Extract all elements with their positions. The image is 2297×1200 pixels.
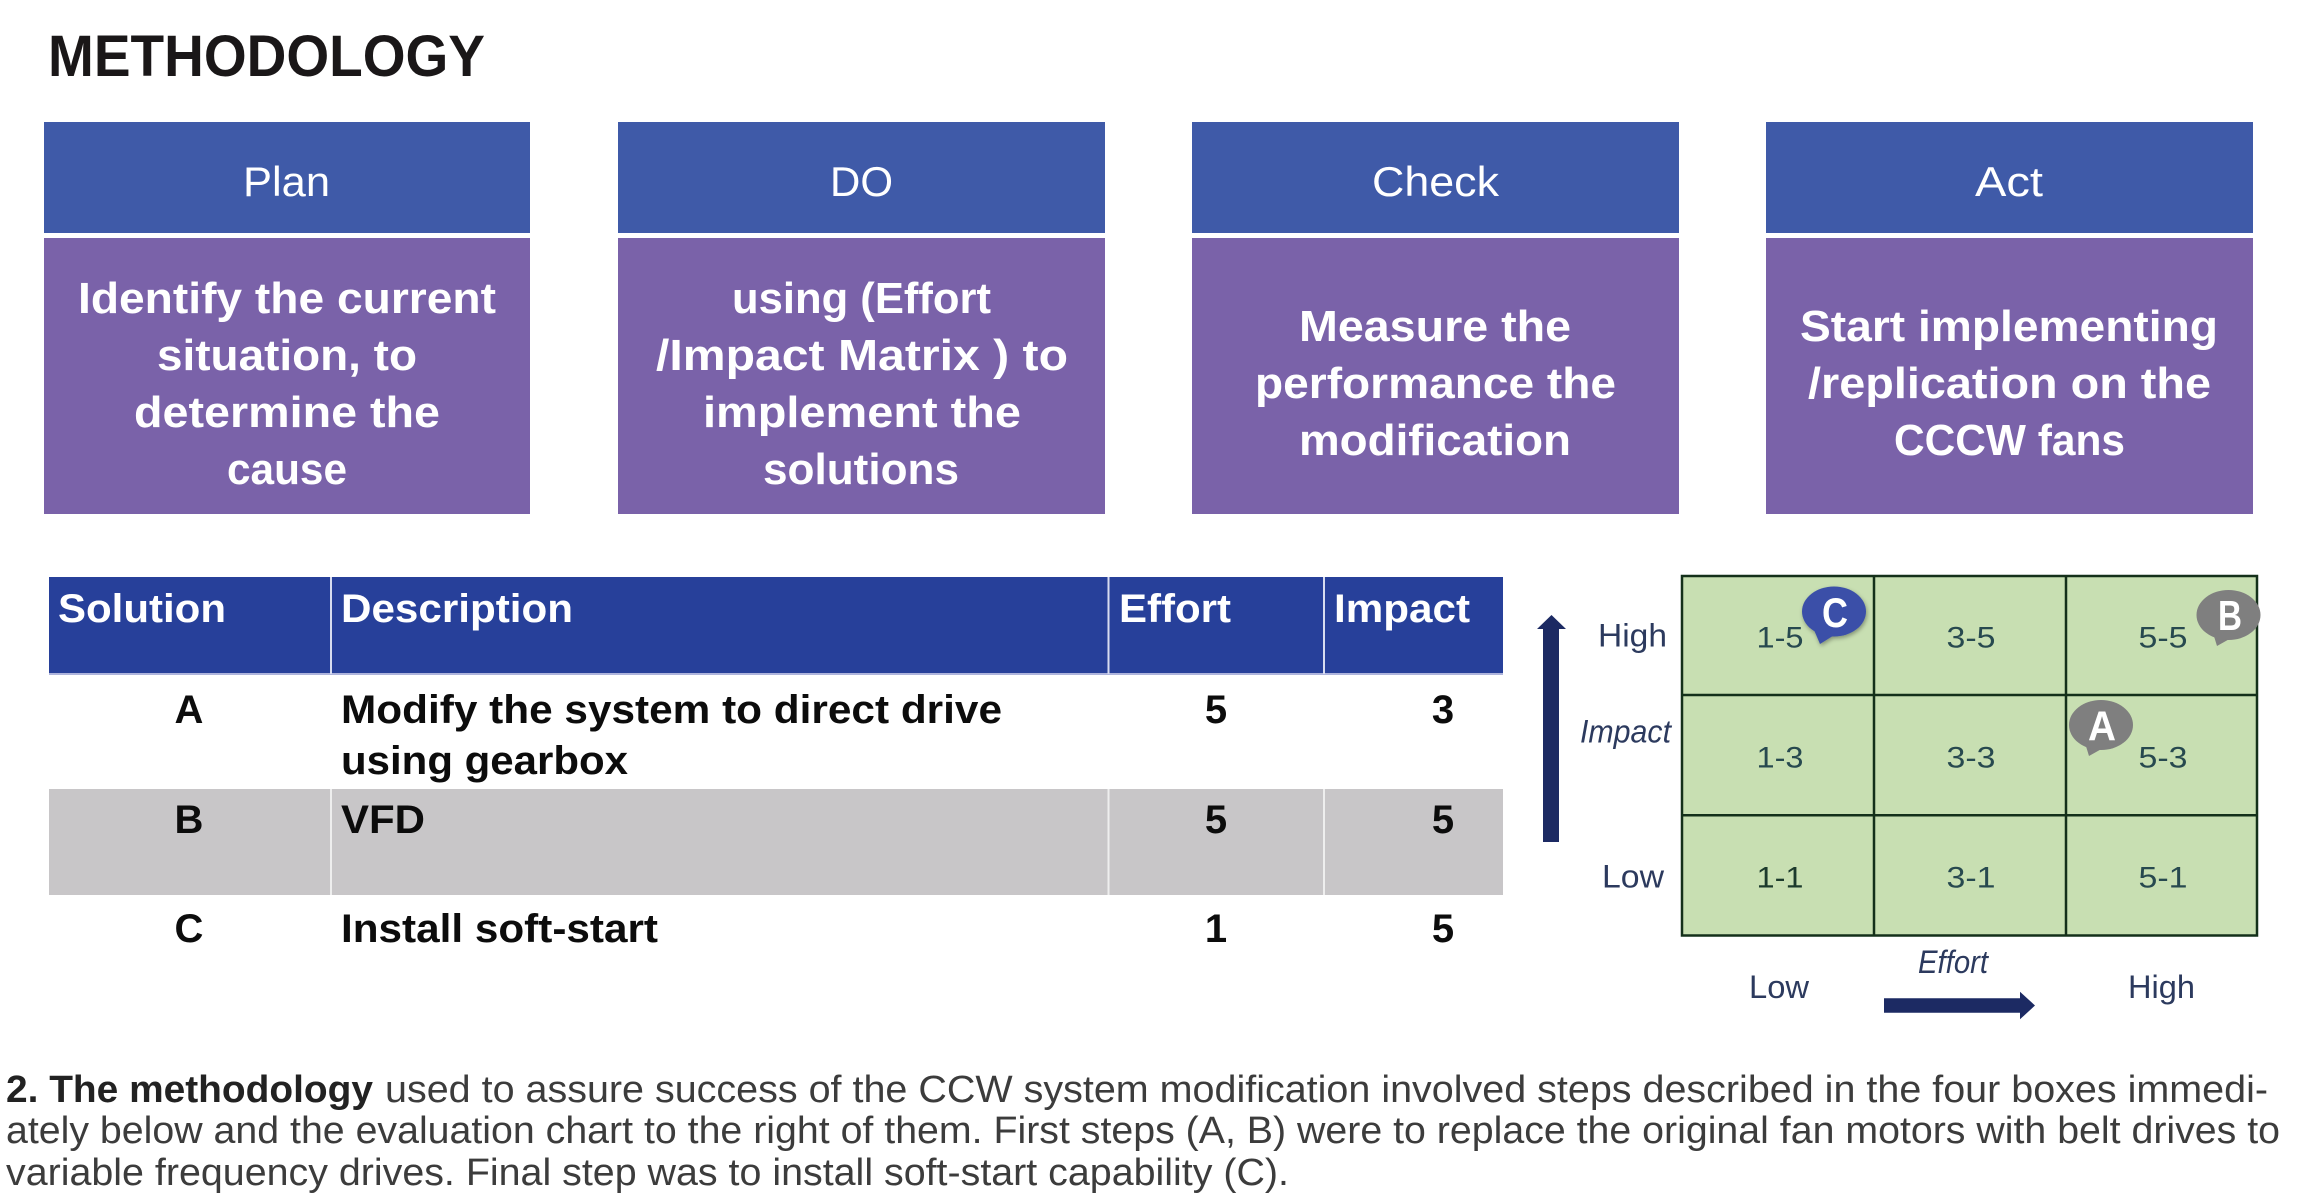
act body: /replication on the	[1808, 359, 2211, 408]
marker C	[1802, 586, 1866, 644]
marker A	[2069, 700, 2133, 756]
row C: C	[175, 907, 203, 951]
matrix grid: 5-5	[2138, 622, 2188, 655]
row B: VFD	[341, 798, 425, 842]
row B: B	[175, 798, 203, 842]
plan body	[44, 238, 530, 514]
do header: DO	[830, 158, 893, 205]
act body: Start implementing	[1800, 302, 2218, 351]
check body: performance the	[1255, 359, 1616, 408]
matrix grid: 1-3	[1756, 741, 1804, 774]
do body: /Impact Matrix ) to	[656, 331, 1068, 380]
matrix grid: 1-1	[1756, 861, 1804, 894]
row A	[175, 688, 1454, 783]
do body: using (Effort	[732, 274, 991, 323]
plan body: cause	[227, 445, 347, 494]
caption text: ately below and the evaluation chart to the right of them. First steps (A, B) were to replace the original fan motors with belt drives to	[6, 1110, 2280, 1152]
row A: Modify the system to direct drive	[341, 688, 1002, 732]
act header: Act	[1975, 158, 2043, 205]
table header row	[49, 577, 1503, 675]
check body	[1192, 238, 1679, 514]
caption text: variable frequency drives. Final step was to install soft-start capability (C).	[6, 1152, 1289, 1194]
effort axis labels: High	[2128, 969, 2195, 1005]
caption text: 2. The methodology	[6, 1069, 373, 1111]
matrix grid: 1-5	[1756, 622, 1804, 655]
row C	[175, 907, 1454, 951]
table header row: Solution	[58, 587, 226, 631]
impact axis labels	[1580, 618, 1672, 894]
do body: implement the	[703, 388, 1021, 437]
caption text: used to assure success of the CCW system modification involved steps described in the four boxes immedi-	[385, 1069, 2268, 1111]
check header	[1192, 122, 1679, 233]
do header	[618, 122, 1105, 233]
panel: act	[1766, 122, 2253, 514]
act header	[1766, 122, 2253, 233]
plan header	[44, 122, 530, 233]
row B: 5	[1432, 798, 1454, 842]
row B: 5	[1205, 798, 1227, 842]
check body: Measure the	[1299, 302, 1571, 351]
row A: A	[175, 688, 203, 732]
effort axis labels: Low	[1749, 969, 1810, 1005]
marker C: C	[1822, 589, 1848, 636]
check body: modification	[1299, 416, 1571, 465]
matrix grid	[1682, 576, 2257, 936]
row C: 5	[1432, 907, 1454, 951]
marker B	[2196, 590, 2260, 646]
act body	[1766, 238, 2253, 514]
plan header: Plan	[243, 158, 330, 205]
check header: Check	[1372, 158, 1500, 205]
table header row: Impact	[1334, 587, 1470, 631]
impact axis labels: High	[1598, 618, 1667, 654]
impact axis labels: Low	[1602, 858, 1665, 894]
impact axis labels: Impact	[1580, 714, 1672, 750]
panel: check	[1192, 122, 1679, 514]
arrow: impact	[1537, 615, 1566, 842]
effort axis labels	[1749, 944, 2195, 1005]
matrix grid: 5-1	[2138, 861, 2188, 894]
arrow: effort	[1884, 992, 2035, 1019]
plan body: Identify the current	[78, 274, 496, 323]
do body: solutions	[763, 445, 959, 494]
marker B: B	[2218, 592, 2242, 639]
plan body: situation, to	[157, 331, 417, 380]
title: METHODOLOGY	[48, 24, 485, 89]
row A: 3	[1432, 688, 1454, 732]
effort axis labels: Effort	[1918, 944, 1989, 980]
matrix grid: 3-3	[1946, 741, 1996, 774]
caption text	[6, 1069, 2280, 1194]
row C: Install soft-start	[341, 907, 658, 951]
row A: 5	[1205, 688, 1227, 732]
table header row: Description	[341, 587, 573, 631]
matrix grid: 3-5	[1946, 622, 1996, 655]
do body	[618, 238, 1105, 514]
panel: plan	[44, 122, 530, 514]
row C: 1	[1205, 907, 1227, 951]
solutions table	[49, 577, 1503, 951]
marker A: A	[2088, 702, 2116, 750]
row A: using gearbox	[341, 739, 628, 783]
matrix grid: 3-1	[1946, 861, 1996, 894]
matrix grid: 5-3	[2138, 741, 2188, 774]
row B	[49, 789, 1503, 895]
table header row: Effort	[1119, 587, 1231, 631]
panel: do	[618, 122, 1105, 514]
act body: CCCW fans	[1894, 416, 2125, 465]
effort impact matrix	[1537, 576, 2260, 1019]
plan body: determine the	[134, 388, 440, 437]
